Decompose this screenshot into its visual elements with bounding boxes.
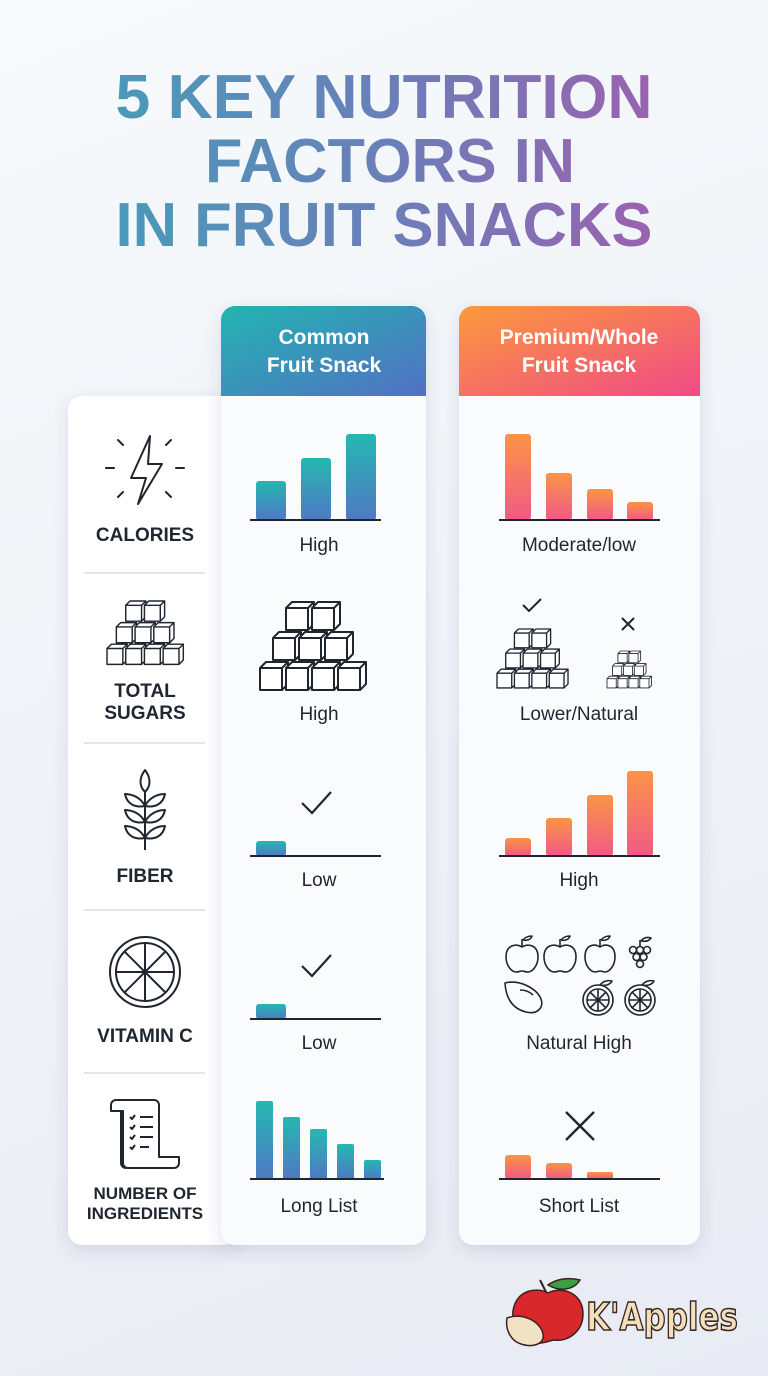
chart: premium ingredients	[499, 1112, 660, 1217]
icon: scroll list	[111, 1100, 179, 1168]
chart: premium calories: Moderate/low	[522, 535, 636, 556]
title: 5 KEY NUTRITION	[116, 63, 652, 132]
row: fiber label: FIBER	[116, 866, 174, 887]
chart: premium fiber: High	[559, 870, 599, 891]
logo: K'Apples	[507, 1279, 738, 1346]
icon: apple	[507, 1279, 583, 1346]
chart: premium calories	[499, 434, 660, 556]
row: total sugars label	[104, 601, 186, 724]
text: premium vitamin c: Natural High	[526, 1033, 632, 1054]
chart: common calories	[250, 434, 381, 556]
icon: sugar cubes	[107, 601, 183, 664]
chart: common ingredients: Long List	[280, 1196, 358, 1217]
row: ingredients label: NUMBER OF	[94, 1184, 196, 1203]
chart: common vitamin c: Low	[302, 1033, 337, 1054]
chart: common calories: High	[299, 535, 339, 556]
chart: premium fiber	[499, 771, 660, 891]
chart: common vitamin c	[250, 955, 381, 1054]
title	[116, 63, 652, 260]
row: vitamin c label	[97, 937, 193, 1047]
chart: common ingredients	[250, 1101, 384, 1217]
icon: lightning	[106, 436, 184, 504]
chart: common fiber	[250, 792, 381, 891]
title: FACTORS IN	[205, 127, 575, 196]
row: calories label	[96, 436, 194, 546]
panel: premium fruit snack: Fruit Snack	[522, 354, 636, 377]
row: total sugars label: SUGARS	[104, 703, 186, 724]
title: IN FRUIT SNACKS	[116, 191, 652, 260]
panel: factor labels	[68, 396, 238, 1245]
icon: wheat	[125, 770, 165, 850]
premium sugar comparison: Lower/Natural	[520, 704, 638, 725]
row: calories label: CALORIES	[96, 525, 194, 546]
premium sugar comparison	[497, 599, 652, 725]
panel: common fruit snack	[221, 306, 426, 1245]
logo: K'Apples: K'Apples	[586, 1295, 738, 1339]
panel: premium fruit snack: Premium/Whole	[500, 326, 658, 349]
panel: common fruit snack: Fruit Snack	[267, 354, 381, 377]
row: ingredients label: INGREDIENTS	[87, 1204, 203, 1223]
row dividers	[239, 573, 681, 1073]
panel: common fruit snack: Common	[278, 326, 370, 349]
icon: common sugar cubes	[260, 602, 366, 690]
icons: premium fruits	[505, 936, 655, 1015]
icon: citrus slice	[110, 937, 180, 1007]
panel: premium fruit snack	[459, 306, 700, 1245]
chart: common fiber: Low	[302, 870, 337, 891]
text: common sugar: High	[299, 704, 339, 725]
chart: premium ingredients: Short List	[539, 1196, 620, 1217]
row: ingredients label	[87, 1100, 203, 1223]
row: vitamin c label: VITAMIN C	[97, 1026, 193, 1047]
row: fiber label	[116, 770, 174, 887]
row: total sugars label: TOTAL	[114, 681, 176, 702]
